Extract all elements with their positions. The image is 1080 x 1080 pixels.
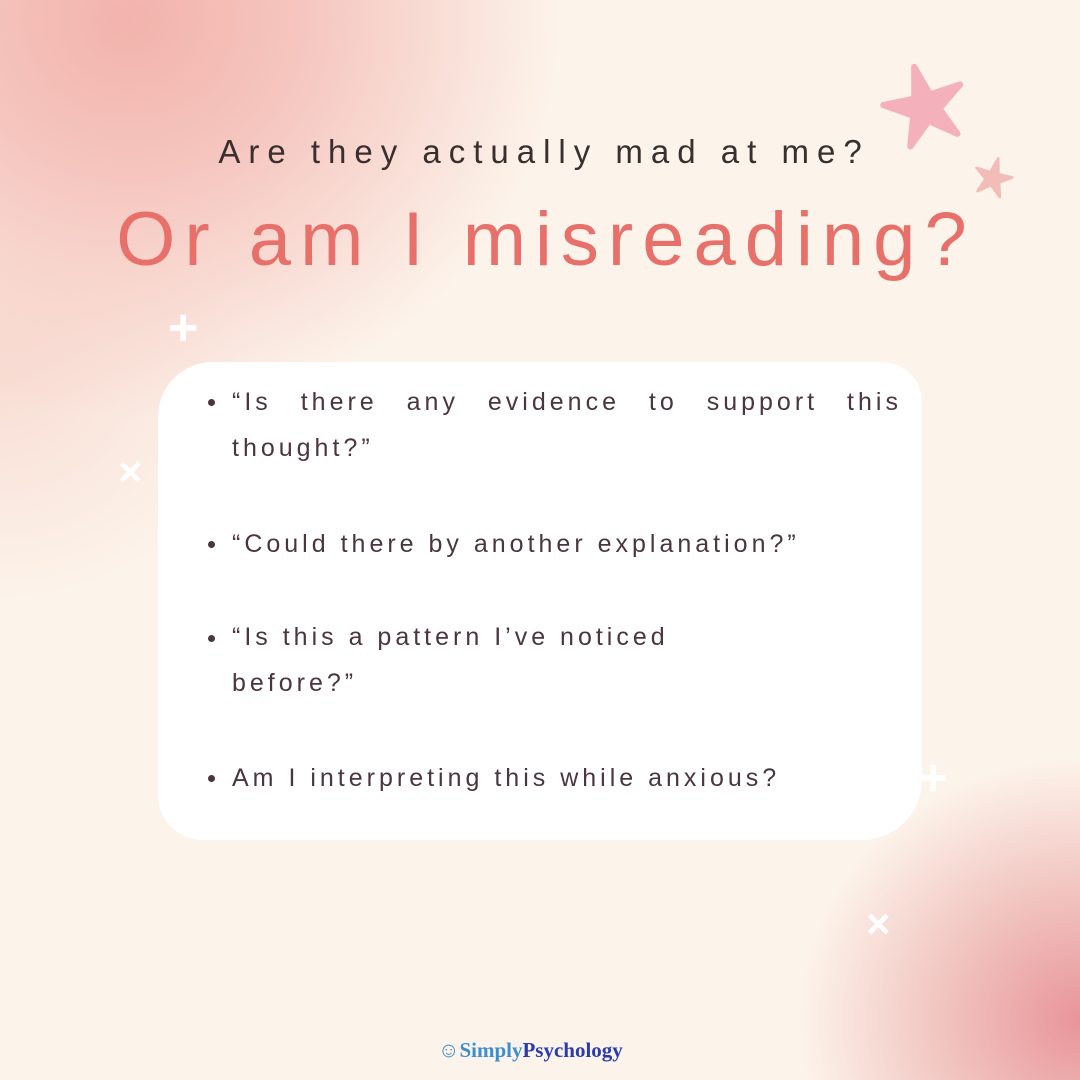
list: questions: Am I interpreting this while anxious? [232,764,780,792]
list: questions: thought?” [232,434,374,462]
sparkles: + [168,299,198,357]
title: headline: Or am I misreading? [116,197,976,282]
sparkles: × [866,900,891,947]
title: question: Are they actually mad at me? [218,133,870,170]
icon: large star [880,64,964,150]
icon: small star [975,157,1014,198]
panel: questions [158,362,922,840]
list: questions: “Could there by another explanation?” [232,530,800,558]
logo: ☺SimplyPsychology [438,1038,623,1062]
list: questions: “Is this a pattern I’ve noticed [232,623,669,651]
sparkles: + [918,749,948,807]
list: questions: before?” [232,669,357,697]
list: questions: “Is there any evidence to support this [232,388,902,416]
sparkles: × [118,448,143,495]
